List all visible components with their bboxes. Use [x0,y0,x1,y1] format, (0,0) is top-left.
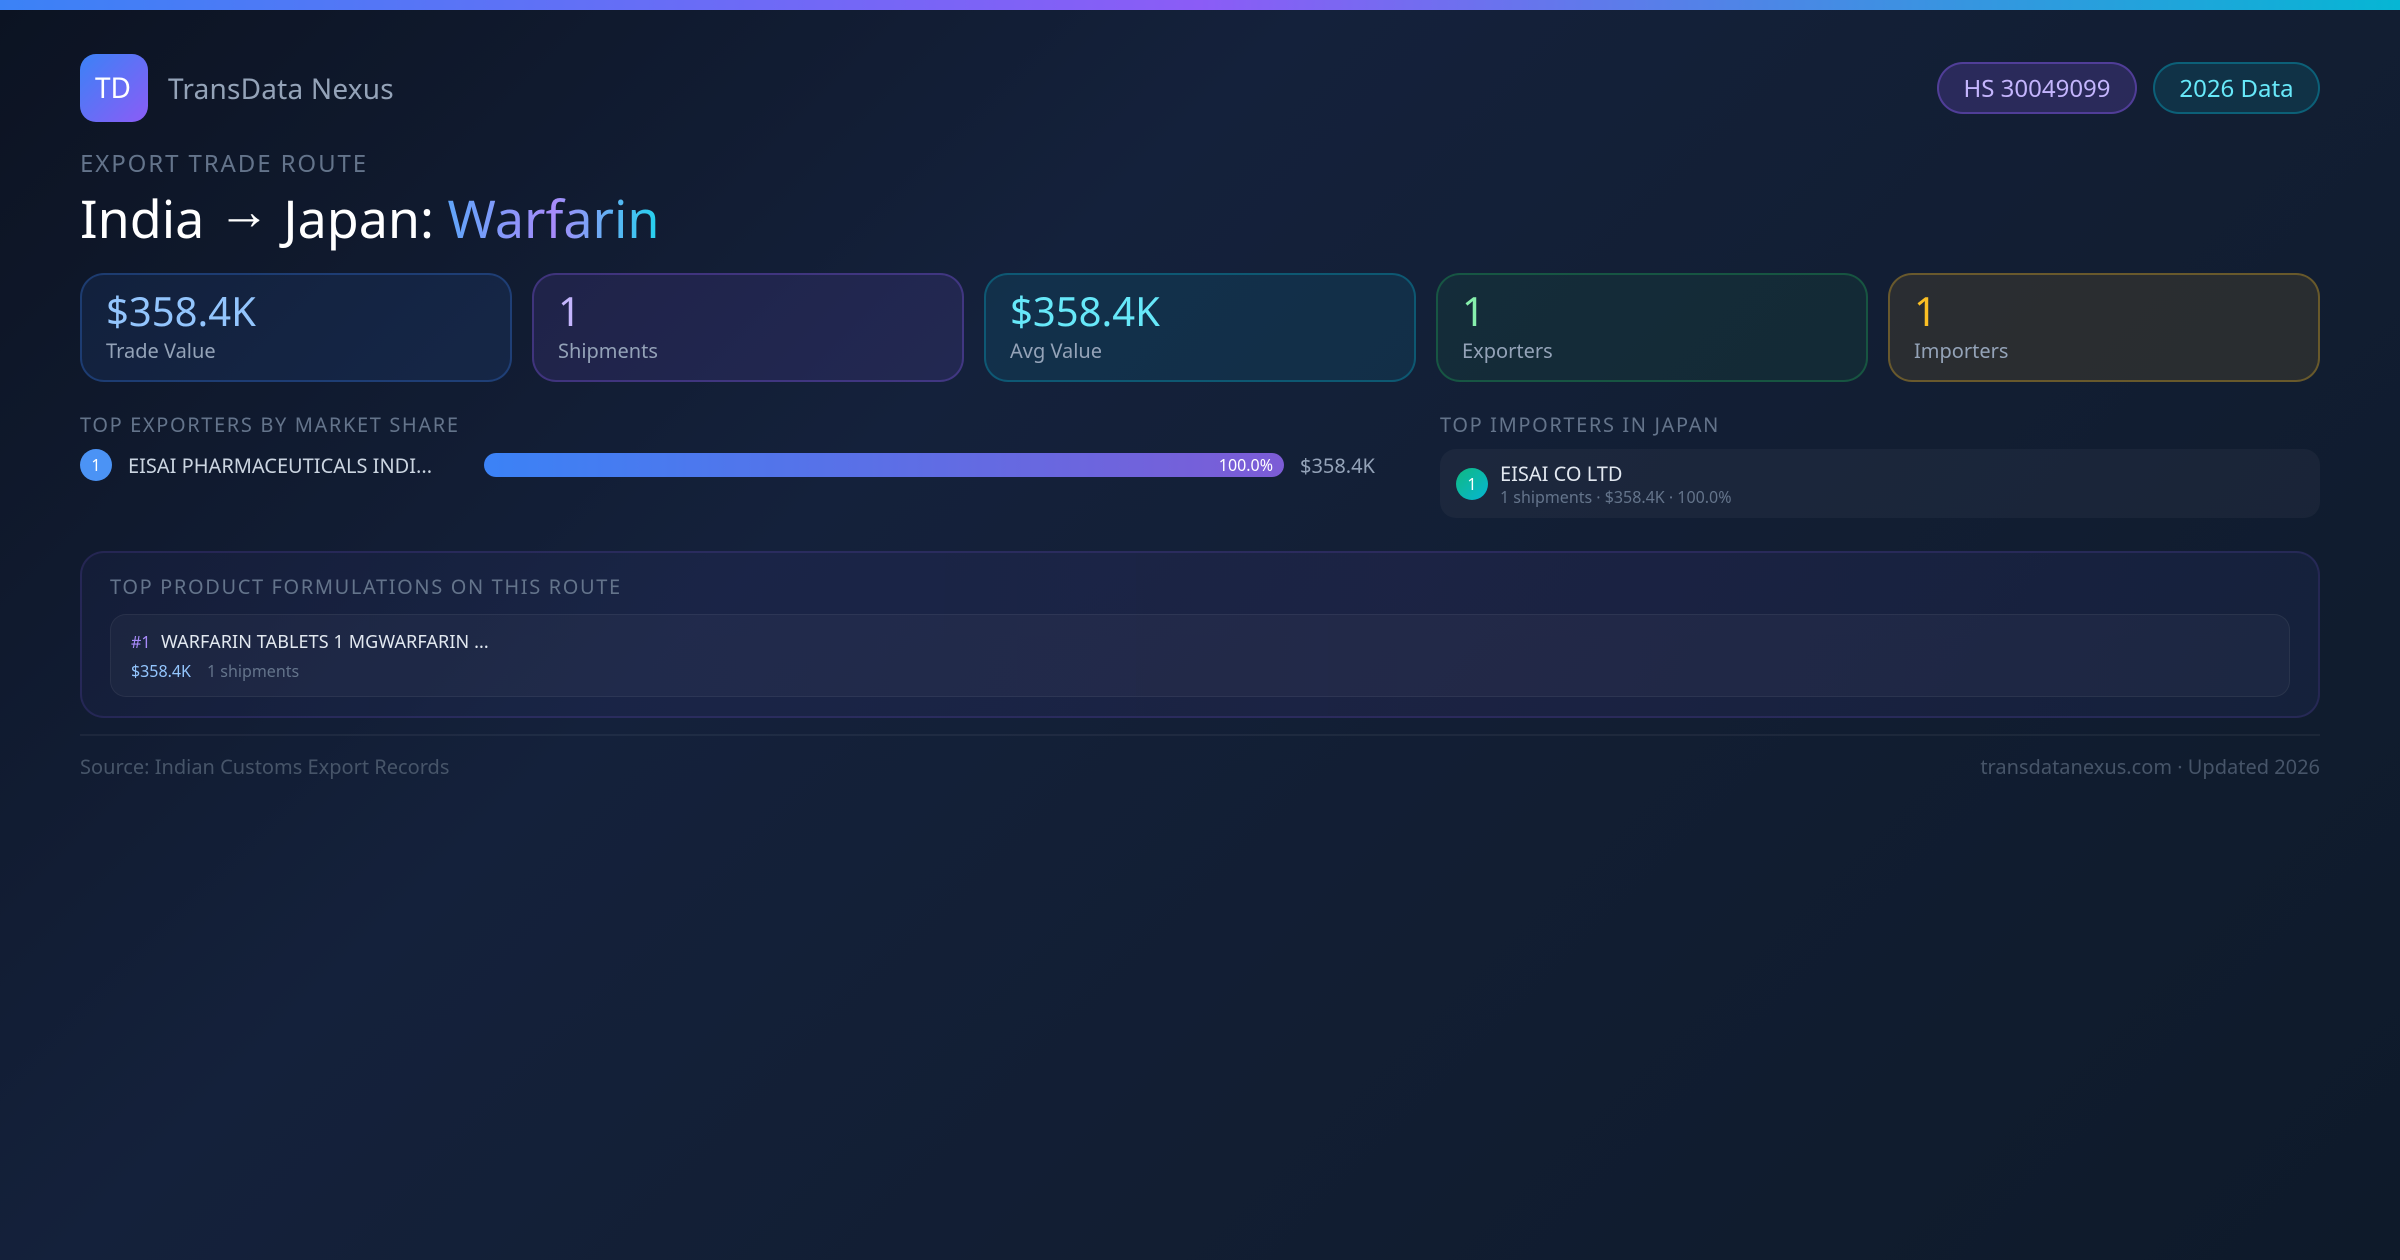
exporter row [80,449,1375,481]
stat card: trade value [80,273,512,382]
item shipments: 1 shipments [207,660,299,682]
item name: WARFARIN TABLETS 1 MGWARFARIN ... [161,630,489,654]
rank badge [80,449,112,481]
stat card: shipments: Shipments [558,337,658,364]
footer site: transdatanexus.com · Updated 2026 [1980,753,2320,780]
logo icon [80,54,148,122]
formulation item [110,614,2290,697]
stat card: importers: 1 [1914,283,1937,338]
market share bar [484,453,1284,477]
exporter name: EISAI PHARMACEUTICALS INDI... [128,452,432,479]
panel heading: TOP PRODUCT FORMULATIONS ON THIS ROUTE [110,573,622,600]
importer name: EISAI CO LTD [1500,460,1622,487]
eyebrow: EXPORT TRADE ROUTE [80,147,368,180]
stat card: avg value: Avg Value [1010,337,1102,364]
stat card: trade value: Trade Value [106,337,216,364]
exporter value: $358.4K [1300,452,1375,479]
brand name: TransData Nexus [168,70,394,108]
exporters heading: TOP EXPORTERS BY MARKET SHARE [80,411,460,438]
item rank: #1 [131,631,150,653]
importers heading: TOP IMPORTERS IN JAPAN [1440,411,1720,438]
footer source: Source: Indian Customs Export Records [80,753,449,780]
logo icon: TD [95,69,131,107]
importer detail: 1 shipments · $358.4K · 100.0% [1500,486,1732,508]
stat card: avg value [984,273,1416,382]
stat card: shipments [532,273,964,382]
stat card: importers: Importers [1914,337,2008,364]
rank badge: 1 [1467,473,1477,495]
badge: data year [2153,62,2320,114]
footer divider [80,734,2320,736]
stat card: importers [1888,273,2320,382]
importer card [1440,449,2320,518]
stat card: exporters: Exporters [1462,337,1553,364]
stat card: avg value: $358.4K [1010,283,1160,338]
badge: data year: 2026 Data [2179,72,2294,105]
rank badge: 1 [91,454,101,476]
badge: HS code: HS 30049099 [1963,72,2111,105]
badge: HS code [1937,62,2137,114]
item value: $358.4K [131,660,191,682]
stat card: exporters [1436,273,1868,382]
market share bar: 100.0% [1219,454,1273,476]
stat card: exporters: 1 [1462,283,1485,338]
top gradient bar [0,0,2400,10]
rank badge [1456,468,1488,500]
stat card: trade value: $358.4K [106,283,256,338]
stat card: shipments: 1 [558,283,581,338]
title: India → Japan: Warfarin [80,183,660,254]
panel: product formulations [80,551,2320,718]
